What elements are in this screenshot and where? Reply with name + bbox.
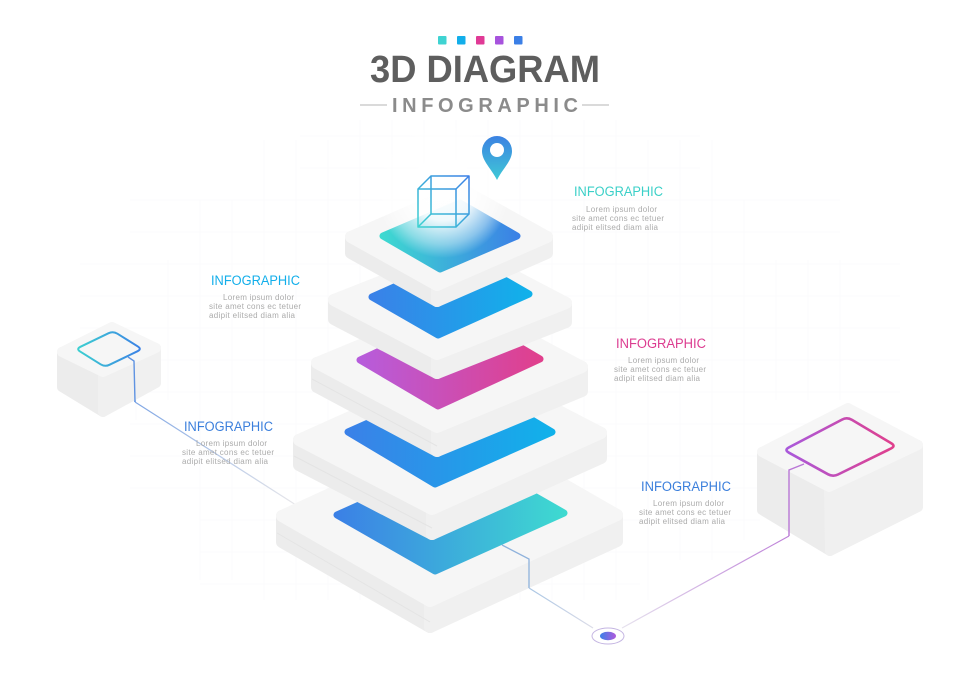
layer 4 color panel: [348, 380, 552, 484]
color squares: [438, 36, 522, 44]
node: [592, 628, 624, 644]
label: lower left: site amet cons ec tetuer: [182, 448, 274, 457]
label: upper left: site amet cons ec tetuer: [209, 302, 301, 311]
label: upper left: Lorem ipsum dolor: [223, 293, 294, 302]
subtitle: INFOGRAPHIC: [392, 95, 578, 117]
connector: base to node: [502, 545, 593, 628]
connector: small cube to base: [128, 357, 296, 505]
label: middle right: Lorem ipsum dolor: [628, 356, 699, 365]
label: top right: [572, 184, 664, 232]
label: top right: site amet cons ec tetuer: [572, 214, 664, 223]
icon: wireframe cube: [418, 176, 469, 227]
layer 2 color panel: [372, 256, 529, 335]
layer 1 color panel: [383, 203, 517, 269]
label: lower right: adipit elitsed diam alia: [639, 517, 726, 526]
label: middle right: INFOGRAPHIC: [616, 336, 706, 351]
layer 5 color panel: [337, 457, 564, 571]
label: lower left: INFOGRAPHIC: [184, 419, 273, 434]
label: top right: adipit elitsed diam alia: [572, 223, 659, 232]
icon: location pin: [482, 136, 512, 180]
label: lower left: Lorem ipsum dolor: [196, 439, 267, 448]
label: lower right: Lorem ipsum dolor: [653, 499, 724, 508]
label: top right: Lorem ipsum dolor: [586, 205, 657, 214]
label: lower right: site amet cons ec tetuer: [639, 508, 731, 517]
layer 3 color panel: [360, 313, 540, 406]
label: middle right: adipit elitsed diam alia: [614, 374, 701, 383]
label: upper left: INFOGRAPHIC: [211, 273, 300, 288]
title: 3D DIAGRAM: [370, 49, 600, 91]
layer 5 base: [277, 430, 617, 627]
label: middle right: site amet cons ec tetuer: [614, 365, 706, 374]
label: top right: INFOGRAPHIC: [574, 184, 663, 199]
connector: big cube to node: [622, 536, 789, 628]
glow: [375, 122, 511, 258]
layer 2: [334, 249, 566, 373]
label: lower right: [639, 479, 731, 526]
layer 4: [294, 364, 601, 534]
label: lower right: INFOGRAPHIC: [641, 479, 731, 494]
layer 1 top: [351, 122, 547, 301]
label: upper left: [209, 273, 301, 320]
small cube left: [62, 327, 156, 412]
label: middle right: [614, 336, 706, 383]
layer 3: [312, 303, 582, 451]
big cube right: [762, 408, 918, 551]
label: lower left: [182, 419, 274, 466]
label: lower left: adipit elitsed diam alia: [182, 457, 269, 466]
label: upper left: adipit elitsed diam alia: [209, 311, 296, 320]
